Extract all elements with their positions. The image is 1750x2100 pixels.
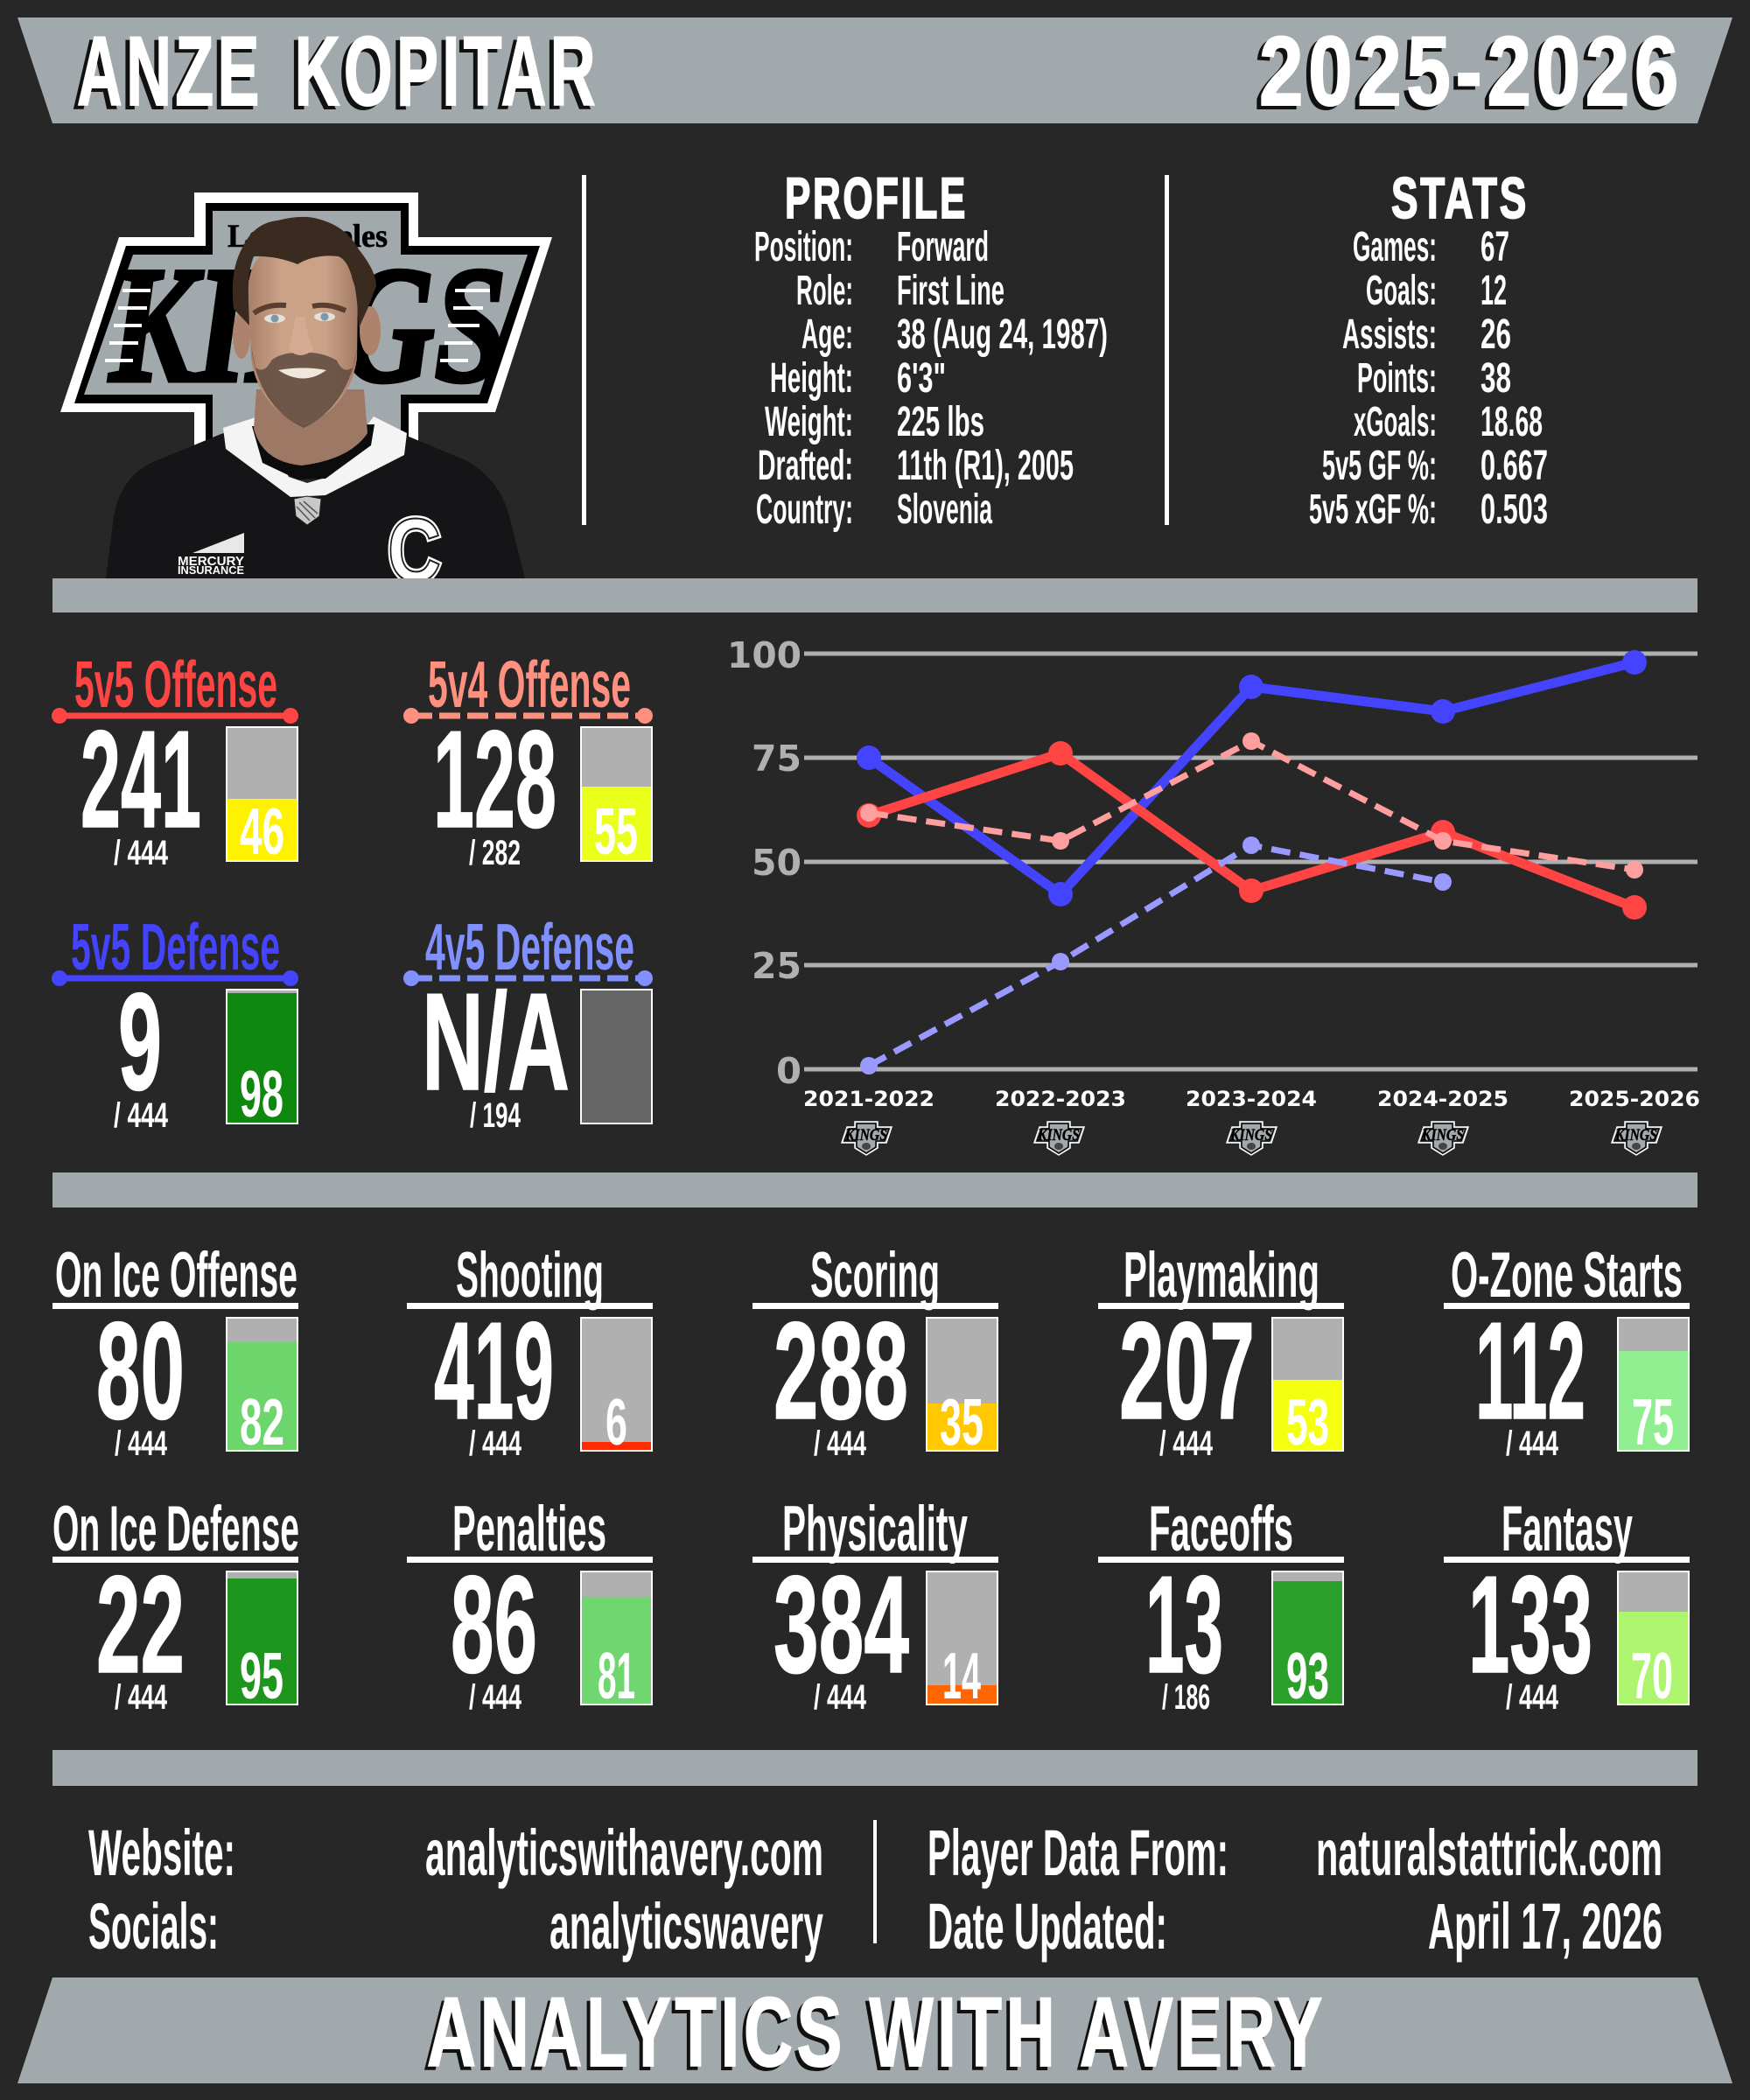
- panel: on ice offense: [52, 1240, 298, 1463]
- panel: shooting: / 444: [469, 1424, 522, 1463]
- ears: [233, 306, 381, 359]
- icon: team logo 2023-2024: KINGS: [1229, 1126, 1272, 1144]
- player name: [73, 17, 599, 130]
- total: / 444: [114, 834, 169, 872]
- stats labels: Points:: [1357, 355, 1437, 402]
- panel: playmaking: 207: [1119, 1294, 1255, 1448]
- profile values: 6'3": [897, 355, 946, 402]
- panel: physicality: 14: [942, 1639, 981, 1712]
- panel: 4v5 defense: [403, 910, 653, 1135]
- panel: playmaking: Playmaking: [1124, 1240, 1320, 1311]
- footer banner: [18, 1978, 1732, 2090]
- stats labels: Goals:: [1366, 268, 1437, 314]
- credits: right: Date Updated:: [928, 1890, 1167, 1963]
- panel: penalties: Penalties: [452, 1494, 606, 1564]
- panel: fantasy: [1444, 1494, 1690, 1717]
- panel: 5v4 offense: [403, 648, 653, 872]
- panel: on ice offense: On Ice Offense: [55, 1240, 298, 1311]
- y axis labels: 75: [752, 738, 802, 780]
- jersey: [106, 433, 525, 578]
- stats labels: [1309, 224, 1437, 533]
- footer title: [424, 1978, 1326, 2090]
- player name: ANZE KOPITAR: [73, 20, 595, 130]
- panel: fantasy: / 444: [1506, 1678, 1559, 1717]
- stats values: 26: [1480, 312, 1511, 358]
- stats labels: Games:: [1353, 224, 1437, 270]
- credits: right: Player Data From:: [928, 1816, 1228, 1889]
- stats values: [1480, 224, 1548, 533]
- panel: playmaking: 53: [1286, 1385, 1329, 1459]
- total: / 444: [114, 1096, 169, 1135]
- total: / 282: [469, 834, 521, 872]
- legend line: [403, 970, 653, 986]
- credits: right: [928, 1816, 1662, 1963]
- series: 4v5 defense: [860, 836, 1452, 1074]
- y axis labels: 0: [776, 1050, 802, 1092]
- panel: physicality: 384: [774, 1548, 909, 1702]
- panel: o-zone starts: [1444, 1240, 1690, 1463]
- nose: [289, 317, 313, 355]
- profile labels: Age:: [802, 312, 853, 358]
- panel: scoring: [752, 1240, 998, 1463]
- panel: faceoffs: / 186: [1162, 1678, 1210, 1717]
- stats labels: 5v5 GF %:: [1322, 443, 1437, 489]
- panel: o-zone starts: 112: [1475, 1294, 1586, 1448]
- panel: profile: [754, 165, 1108, 533]
- face: [248, 241, 358, 426]
- panel: on ice defense: 22: [96, 1548, 185, 1702]
- panel: scoring: Scoring: [810, 1240, 940, 1311]
- y axis labels: 25: [752, 945, 802, 987]
- neck: [254, 389, 368, 466]
- panel: faceoffs: Faceoffs: [1149, 1494, 1293, 1564]
- profile labels: Drafted:: [758, 443, 853, 489]
- icon: team logo 2025-2026: [1612, 1122, 1662, 1155]
- rank: 9: [118, 965, 162, 1119]
- panel: stats: [1309, 165, 1548, 533]
- captain C: C: [388, 500, 441, 600]
- icon: team logo 2021-2022: [842, 1122, 892, 1155]
- footer title: ANALYTICS WITH AVERY: [424, 1981, 1323, 2090]
- series: 5v4 offense: [860, 732, 1643, 878]
- stats labels: 5v5 xGF %:: [1309, 486, 1437, 533]
- icon: team logo 2022-2023: [1034, 1122, 1084, 1155]
- profile labels: Height:: [770, 355, 853, 402]
- profile values: 11th (R1), 2005: [897, 443, 1074, 489]
- sponsor patch: INSURANCE: [178, 564, 244, 577]
- panel: 5v5 offense: [52, 648, 298, 872]
- profile labels: Role:: [796, 268, 853, 314]
- legend line: [52, 708, 298, 724]
- panel: on ice defense: 95: [240, 1639, 284, 1712]
- NHL shield: [294, 496, 321, 525]
- panel: shooting: Shooting: [456, 1240, 604, 1311]
- panel: scoring: 288: [774, 1294, 908, 1448]
- line chart: [727, 634, 1700, 1155]
- panel: on ice offense: 80: [96, 1294, 185, 1448]
- undershirt: [252, 424, 374, 480]
- x axis labels: [803, 1087, 1700, 1111]
- panel: scoring: 35: [940, 1385, 984, 1459]
- legend line: [52, 970, 298, 986]
- heading: 5v5 Offense: [74, 648, 277, 721]
- panel: o-zone starts: / 444: [1506, 1424, 1559, 1463]
- stats values: 38: [1480, 355, 1511, 402]
- panel: physicality: [752, 1494, 998, 1717]
- eyes and brows: [254, 305, 346, 323]
- stats labels: Assists:: [1342, 312, 1437, 358]
- icon: team logo 2024-2025: KINGS: [1421, 1126, 1464, 1144]
- team logo: [60, 192, 552, 455]
- panel: penalties: 81: [598, 1639, 635, 1712]
- x axis labels: 2024-2025: [1377, 1087, 1508, 1111]
- panel: faceoffs: 13: [1145, 1548, 1223, 1702]
- panel: physicality: / 444: [814, 1678, 867, 1717]
- sponsor patch: [178, 533, 244, 577]
- x axis labels: 2025-2026: [1569, 1087, 1700, 1111]
- stats values: 67: [1480, 224, 1509, 270]
- team logo: KINGS: [108, 234, 507, 417]
- icon: team logo 2023-2024: [1227, 1122, 1277, 1155]
- gridlines: [804, 654, 1698, 1069]
- x axis labels: 2023-2024: [1186, 1087, 1317, 1111]
- profile values: First Line: [897, 268, 1004, 314]
- smile: [278, 368, 326, 378]
- profile values: Forward: [897, 224, 989, 270]
- profile values: 225 lbs: [897, 399, 984, 445]
- profile labels: [754, 224, 853, 533]
- panel: penalties: [407, 1494, 653, 1717]
- panel: 5v5 defense: [52, 910, 298, 1135]
- panel: shooting: 419: [434, 1294, 554, 1448]
- profile labels: Country:: [756, 486, 853, 533]
- stats heading: STATS: [1391, 165, 1529, 230]
- icon: team logo 2025-2026: KINGS: [1614, 1126, 1657, 1144]
- y axis labels: 50: [752, 842, 802, 884]
- icon: team logo 2022-2023: KINGS: [1037, 1126, 1080, 1144]
- sponsor patch: MERCURY: [178, 554, 244, 569]
- collar: [223, 416, 407, 497]
- credits: left: [88, 1816, 823, 1963]
- series: 5v5 offense: [857, 741, 1647, 920]
- panel: shooting: 6: [606, 1385, 627, 1459]
- stats values: 0.667: [1480, 443, 1548, 489]
- rank: N/A: [422, 965, 570, 1119]
- profile values: [897, 224, 1108, 533]
- panel: scoring: / 444: [814, 1424, 867, 1463]
- rank: 128: [433, 703, 556, 857]
- panel: on ice defense: / 444: [115, 1678, 168, 1717]
- percentile bar: [581, 990, 652, 1124]
- panel: penalties: / 444: [469, 1678, 522, 1717]
- credits: left: Socials:: [88, 1890, 219, 1963]
- stats labels: xGoals:: [1354, 399, 1437, 445]
- icon: team logo 2021-2022: KINGS: [844, 1126, 887, 1144]
- credits: left: Website:: [88, 1816, 235, 1889]
- beard: [251, 346, 358, 428]
- panel: faceoffs: 93: [1286, 1639, 1329, 1712]
- percentile bar: 98: [240, 1057, 284, 1130]
- percentile bar: [581, 727, 652, 868]
- profile heading: PROFILE: [785, 165, 968, 230]
- hair: [233, 217, 376, 328]
- profile values: 38 (Aug 24, 1987): [897, 312, 1108, 358]
- panel: playmaking: [1098, 1240, 1344, 1463]
- stats values: 0.503: [1480, 486, 1548, 533]
- percentile bar: [227, 727, 298, 868]
- profile labels: Position:: [754, 224, 853, 270]
- y axis labels: 100: [727, 634, 802, 676]
- stats values: 12: [1480, 268, 1507, 314]
- y axis labels: [727, 634, 802, 1092]
- profile values: Slovenia: [897, 486, 992, 533]
- x axis labels: 2021-2022: [803, 1087, 934, 1111]
- heading: 5v5 Defense: [71, 910, 280, 984]
- series: 5v5 defense: [857, 650, 1647, 906]
- team logo: Los Angeles: [228, 219, 388, 255]
- profile labels: Weight:: [765, 399, 853, 445]
- percentile bar: 55: [594, 794, 638, 868]
- footer title: ANALYTICS WITH AVERY: [427, 1978, 1326, 2087]
- icon: team logo 2024-2025: [1418, 1122, 1468, 1155]
- player portrait: [106, 217, 525, 600]
- credits: left: analyticswithavery.com: [425, 1816, 823, 1889]
- panel: playmaking: / 444: [1159, 1424, 1214, 1463]
- percentile bar: 46: [240, 794, 284, 868]
- panel: shooting: [407, 1240, 653, 1463]
- panel: o-zone starts: 75: [1632, 1385, 1674, 1459]
- panel: fantasy: 70: [1631, 1639, 1673, 1712]
- player name: ANZE KOPITAR: [77, 17, 599, 126]
- panel: penalties: 86: [451, 1548, 537, 1702]
- heading: 4v5 Defense: [425, 910, 634, 984]
- rank: 241: [80, 703, 201, 857]
- panel: faceoffs: [1098, 1494, 1344, 1717]
- panel: on ice offense: 82: [240, 1385, 284, 1459]
- heading: 5v4 Offense: [428, 648, 631, 721]
- panel: on ice defense: [52, 1494, 299, 1717]
- panel: physicality: Physicality: [782, 1494, 968, 1564]
- percentile bar: [227, 990, 298, 1130]
- x axis labels: 2022-2023: [995, 1087, 1126, 1111]
- panel: on ice offense: / 444: [115, 1424, 168, 1463]
- credits: left: analyticswavery: [550, 1890, 823, 1963]
- legend line: [403, 708, 653, 724]
- header banner: [18, 17, 1732, 130]
- stats values: 18.68: [1480, 399, 1543, 445]
- panel: fantasy: 133: [1468, 1548, 1592, 1702]
- captain C: C: [388, 500, 441, 600]
- panel: fantasy: Fantasy: [1502, 1494, 1633, 1564]
- panel: on ice defense: On Ice Defense: [52, 1494, 299, 1564]
- total: / 194: [470, 1096, 521, 1135]
